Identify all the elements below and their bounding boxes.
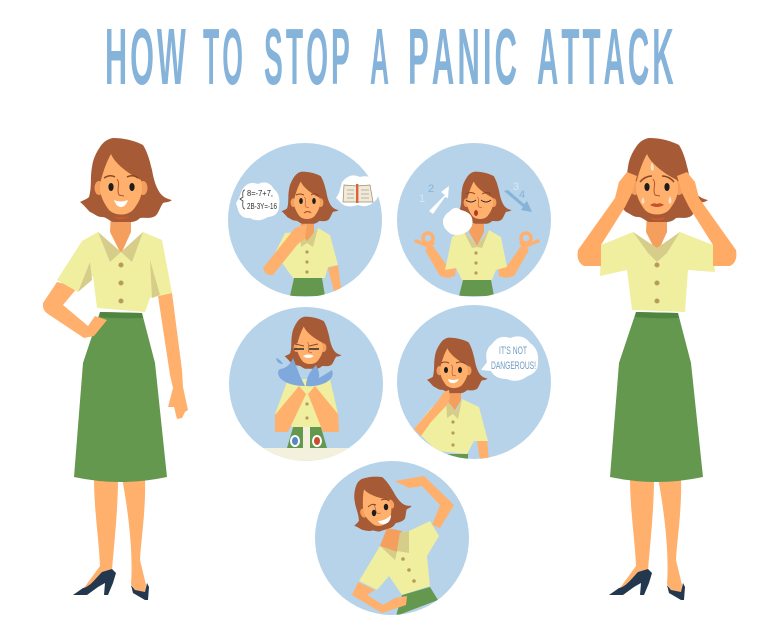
breath counts bbox=[419, 181, 525, 205]
panel: panicking woman standing bbox=[578, 138, 736, 600]
figure bbox=[352, 476, 454, 615]
panel: step 1 distract with maths and reading bbox=[228, 143, 382, 297]
collar bbox=[98, 232, 143, 262]
breath counts: 3 bbox=[513, 181, 519, 193]
panel: step 3 wash face with cold water bbox=[229, 307, 383, 470]
left arm on hip bbox=[43, 282, 107, 338]
speech cloud: IT'S NOT bbox=[499, 345, 527, 357]
circle background bbox=[397, 143, 551, 297]
blouse bbox=[57, 232, 172, 312]
title: A bbox=[370, 11, 389, 101]
title: TO bbox=[203, 12, 246, 101]
sleeve shadows bbox=[78, 260, 160, 298]
collar bbox=[633, 232, 680, 262]
legs, skirt and shoes bbox=[73, 312, 167, 600]
water splash bbox=[276, 358, 333, 386]
figure bbox=[264, 316, 348, 461]
thought cloud with book bbox=[336, 175, 379, 206]
head bbox=[80, 138, 172, 222]
circle background bbox=[315, 461, 469, 615]
figure bbox=[416, 172, 538, 296]
neck bbox=[110, 210, 131, 254]
head bbox=[616, 138, 708, 222]
thought cloud with equations bbox=[236, 182, 279, 220]
panel: calm woman standing bbox=[43, 138, 188, 600]
breath counts: 2 bbox=[428, 183, 434, 195]
breath cloud bbox=[443, 208, 472, 235]
panel: step 5 stretching bbox=[315, 461, 469, 616]
title: ATTACK bbox=[537, 11, 677, 101]
panel: step 4 reassure yourself bbox=[397, 305, 551, 462]
arrow: inhale bbox=[429, 186, 449, 214]
title: PANIC bbox=[408, 12, 520, 101]
ok-sign hands bbox=[416, 233, 538, 248]
circle background bbox=[228, 143, 382, 297]
neck bbox=[646, 210, 667, 254]
thought cloud with equations: 2B-3Y=-16 bbox=[247, 202, 277, 211]
panel: step 2 breathing exercise bbox=[397, 143, 551, 297]
title bbox=[105, 11, 677, 101]
speech cloud: DANGEROUS! bbox=[491, 360, 536, 372]
legs, skirt and shoes bbox=[609, 312, 703, 600]
left arm with hand on head bbox=[578, 172, 637, 266]
thought cloud with equations: 8=-7+7, bbox=[247, 189, 273, 198]
arrow: exhale bbox=[504, 190, 532, 212]
figure bbox=[414, 338, 489, 462]
right arm with hand on head bbox=[677, 172, 736, 266]
circle background bbox=[229, 307, 383, 461]
circle background bbox=[397, 305, 551, 459]
title: STOP bbox=[264, 12, 353, 101]
buttons bbox=[118, 262, 124, 304]
buttons bbox=[654, 262, 660, 304]
breath counts: 1 bbox=[419, 193, 425, 205]
blouse bbox=[600, 232, 715, 312]
speech cloud bbox=[481, 336, 538, 381]
worried face bbox=[640, 162, 674, 220]
figure bbox=[263, 172, 341, 296]
breath counts: 4 bbox=[519, 189, 525, 201]
title: HOW bbox=[105, 11, 189, 101]
right arm bbox=[158, 293, 188, 419]
smiling face bbox=[104, 176, 138, 219]
counter bbox=[264, 448, 348, 461]
